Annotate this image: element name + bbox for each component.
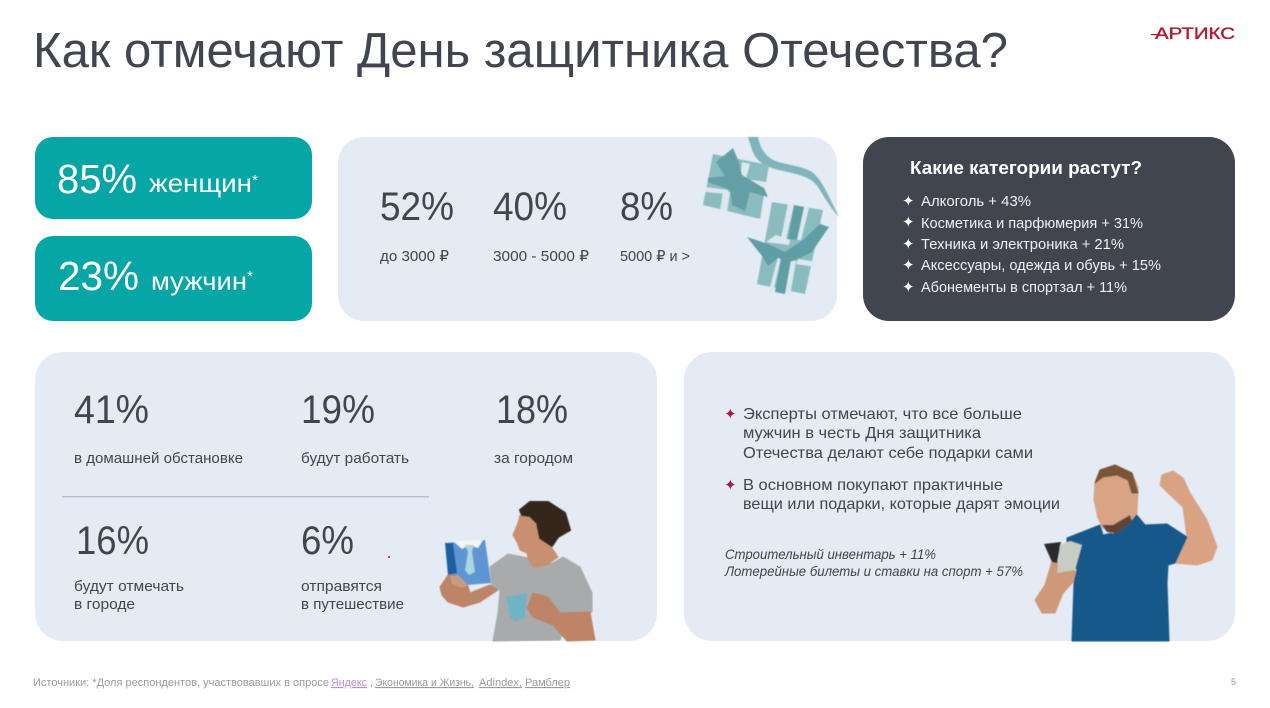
category list: Абонементы в спортзал + 11% [921, 279, 1127, 296]
note: italic growth figures [724, 546, 1023, 579]
note: practical gifts [724, 476, 1060, 513]
stat: out of town: за городом [494, 450, 573, 467]
stat: up to 3000: 52% [380, 185, 454, 229]
stat: travelling: 6% [301, 519, 354, 563]
category list: ✦ [902, 213, 915, 231]
panel heading: Какие категории растут? [910, 158, 1142, 178]
note: self gifts: мужчин в честь Дня защитника [743, 425, 981, 442]
category list: Техника и электроника + 21% [921, 236, 1124, 253]
icon: gift boxes with ribbon [703, 137, 839, 296]
panel: women share: * [252, 172, 258, 189]
panel: how people celebrate [35, 352, 657, 641]
panel: women share [35, 137, 312, 219]
sources footnote [33, 677, 570, 689]
panel: men share: мужчин [151, 266, 247, 296]
category list: ✦ [902, 256, 915, 274]
stat: in the city [74, 519, 184, 613]
note: self gifts: ✦ [724, 405, 737, 423]
stat: in the city: будут отмечать [74, 578, 184, 595]
illustration: man with gift bag and mug [440, 502, 595, 641]
sources footnote: Рамблер [525, 677, 570, 689]
stat: in the city: 16% [76, 519, 149, 563]
panel: men share: * [247, 268, 253, 285]
note: italic growth figures: Лотерейные билеты и ставки на спорт + 57% [724, 563, 1023, 579]
stat: travelling: отправятся [301, 578, 382, 595]
stat: in the city: в городе [74, 596, 135, 613]
stat: out of town [494, 388, 573, 467]
panel: women share: женщин [149, 168, 252, 198]
stat: 3000 to 5000: 40% [493, 185, 567, 229]
page number: 5 [1231, 677, 1236, 687]
category list: ✦ [902, 235, 915, 253]
stat: over 5000: 8% [620, 185, 673, 229]
stat: over 5000: 5000 ₽ и > [620, 248, 690, 265]
panel: men share: 23% [58, 253, 139, 299]
note: self gifts: Эксперты отмечают, что все больше [743, 406, 1022, 423]
category list: Косметика и парфюмерия + 31% [921, 215, 1143, 232]
category list: ✦ [902, 192, 915, 210]
panel: women share: 85% [57, 156, 137, 202]
sources footnote: , [370, 677, 373, 689]
title: Как отмечают День защитника Отечества? [33, 24, 1008, 78]
stat: working: будут работать [301, 450, 409, 467]
category list [902, 192, 1161, 296]
category list: Алкоголь + 43% [921, 193, 1031, 210]
sources footnote: Яндекс [331, 677, 367, 689]
note: practical gifts: В основном покупают практичные [743, 477, 1003, 494]
stat: travelling: в путешествие [301, 596, 404, 613]
stat: at home: 41% [74, 388, 149, 432]
panel: gift budget [338, 137, 839, 321]
panel: expert notes [684, 352, 1235, 641]
stat: working [301, 388, 409, 467]
note: self gifts: Отечества делают себе подарки сами [743, 445, 1033, 462]
stat: at home: в домашней обстановке [74, 450, 243, 467]
panel: men share [35, 236, 312, 321]
stat: at home [74, 388, 243, 467]
sources footnote: Источники: *Доля респондентов, участвовавших в опросе [33, 677, 329, 689]
category list: ✦ [902, 278, 915, 296]
stat: out of town: 18% [496, 388, 568, 432]
sources footnote: Экономика и Жизнь, [375, 677, 474, 689]
stat: travelling [301, 519, 404, 613]
stat: 3000 to 5000 [493, 185, 589, 265]
illustration: celebrating man with money [1035, 465, 1217, 641]
panel: growing categories [863, 137, 1235, 321]
stat: 3000 to 5000: 3000 - 5000 ₽ [493, 248, 589, 265]
logo: АРТИКС [1155, 24, 1235, 43]
stat: up to 3000: до 3000 ₽ [380, 248, 449, 265]
stat: over 5000 [620, 185, 690, 265]
stat: working: 19% [301, 388, 375, 432]
sources footnote: Adindex, [479, 677, 522, 689]
note: practical gifts: ✦ [724, 476, 737, 494]
note: practical gifts: вещи или подарки, которые дарят эмоции [743, 496, 1060, 513]
category list: Аксессуары, одежда и обувь + 15% [921, 257, 1161, 274]
note: italic growth figures: Строительный инвентарь + 11% [725, 546, 936, 562]
note: self gifts [724, 405, 1033, 462]
stat: up to 3000 [380, 185, 454, 265]
